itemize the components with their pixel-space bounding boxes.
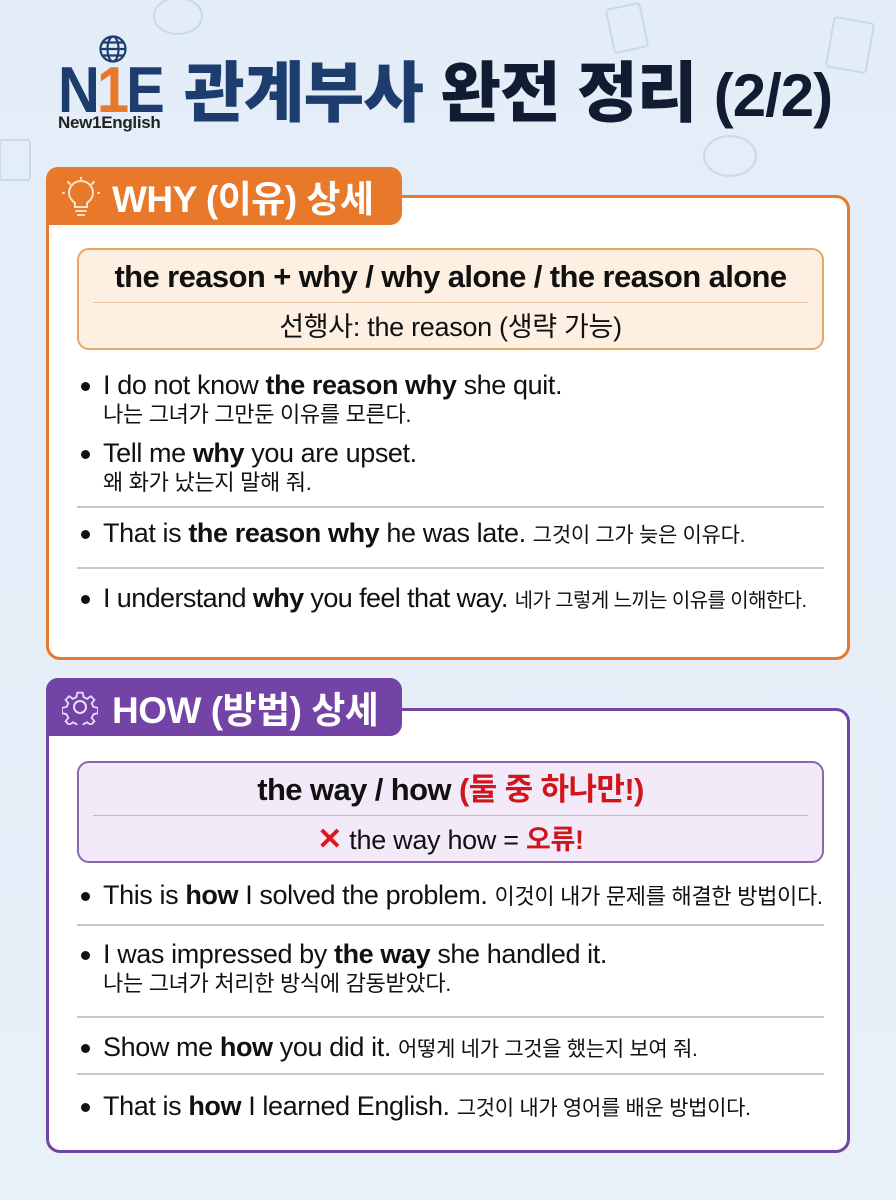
- example 2: 나는 그녀가 처리한 방식에 감동받았다.: [103, 971, 451, 996]
- example 4: I understand why you feel that way. 네가 그렇게 느끼는 이유를 이해한다.: [103, 583, 806, 613]
- tab: how: [46, 678, 402, 736]
- decorative doodles: [0, 0, 874, 181]
- formula box: how: the way / how (둘 중 하나만!): [257, 772, 644, 807]
- formula box: why: [77, 248, 824, 350]
- example 1: 나는 그녀가 그만둔 이유를 모른다.: [103, 402, 411, 427]
- example 3: That is the reason why he was late. 그것이 그가 늦은 이유다.: [103, 518, 745, 548]
- tab: why: WHY (이유) 상세: [112, 179, 374, 220]
- example 1: This is how I solved the problem. 이것이 내가 문제를 해결한 방법이다.: [103, 880, 823, 910]
- formula box: why: the reason + why / why alone / the reason alone: [114, 259, 787, 294]
- formula box: how: ✕ the way how = 오류!: [317, 823, 584, 856]
- formula box: how: [77, 761, 824, 863]
- example 2: I was impressed by the way she handled it.: [103, 939, 607, 969]
- example 2: 왜 화가 났는지 말해 줘.: [103, 470, 312, 495]
- example 1: I do not know the reason why she quit.: [103, 370, 562, 400]
- example 1: [81, 370, 562, 430]
- logo: New1English: [58, 113, 161, 132]
- icon: gear: [62, 692, 98, 725]
- example 2: [81, 939, 607, 999]
- example 4: That is how I learned English. 그것이 내가 영어를 배운 방법이다.: [103, 1091, 751, 1121]
- tab: why: [46, 167, 402, 225]
- title: 관계부사 완전 정리 (2/2): [184, 56, 832, 130]
- logo: N1E: [58, 54, 162, 127]
- panel: why: [46, 195, 850, 660]
- icon: globe: [99, 35, 127, 63]
- example 2: [81, 438, 417, 498]
- icon: lightbulb: [62, 177, 100, 216]
- example 2: Tell me why you are upset.: [103, 438, 417, 468]
- tab: how: HOW (방법) 상세: [112, 690, 378, 731]
- formula box: why: 선행사: the reason (생략 가능): [279, 312, 622, 342]
- panel: how: [46, 708, 850, 1153]
- example 3: Show me how you did it. 어떻게 네가 그것을 했는지 보여 줘.: [103, 1032, 698, 1062]
